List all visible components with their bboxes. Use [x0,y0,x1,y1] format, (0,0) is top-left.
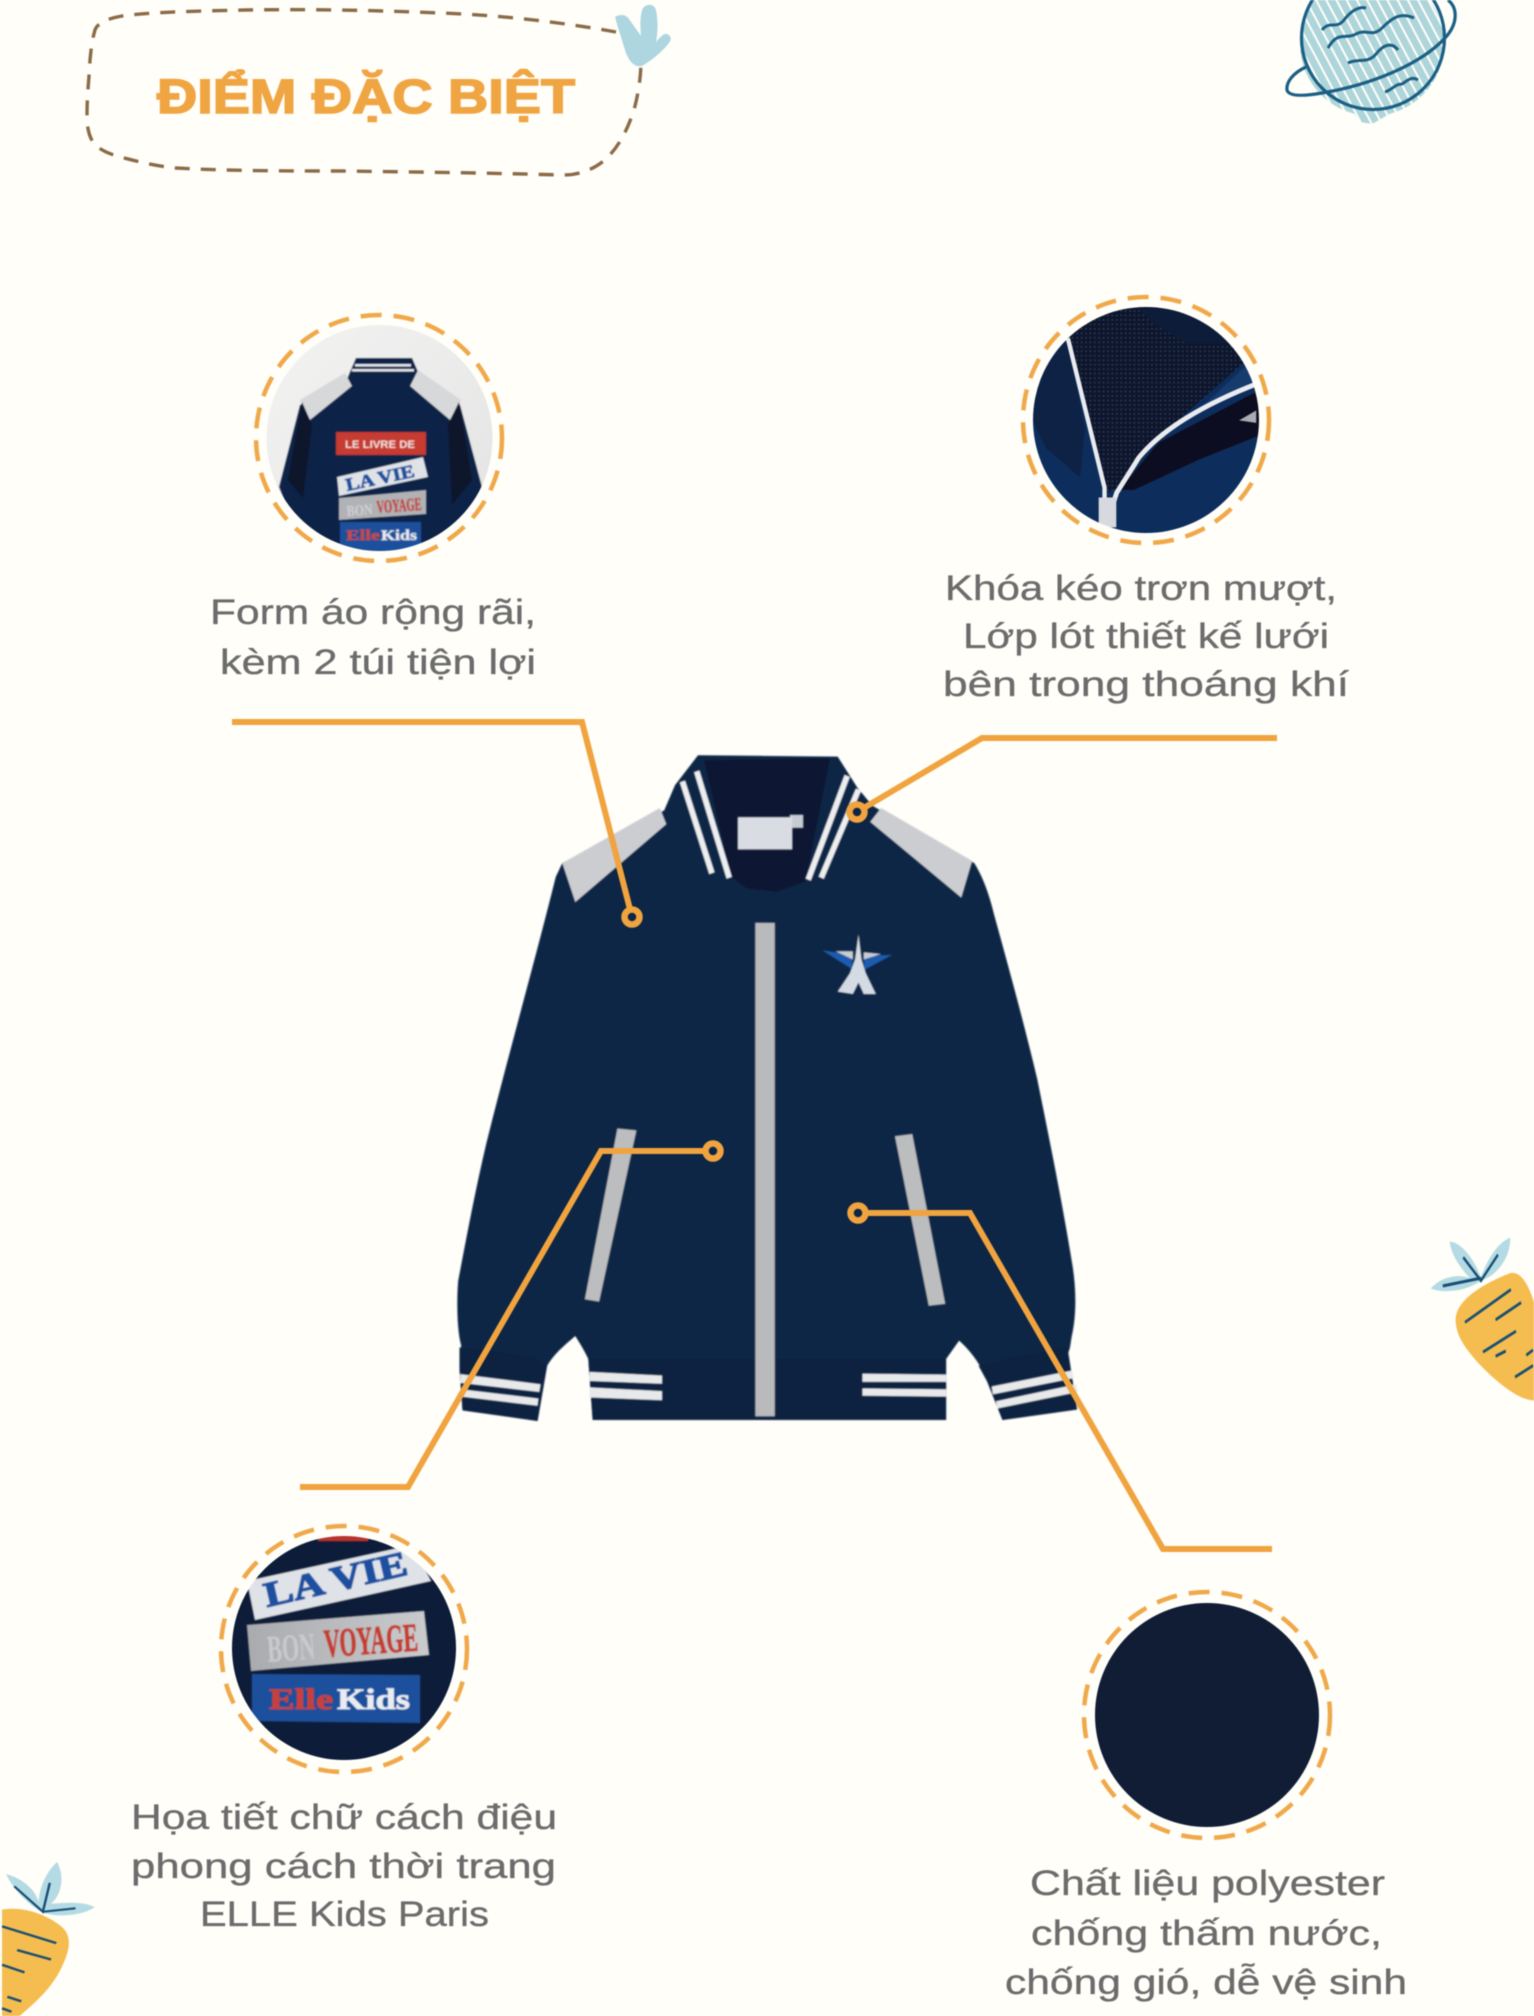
leader line: print [300,1144,720,1487]
leader line: material [850,1206,1272,1549]
panel: loose fit callout [210,315,536,682]
center zipper [755,923,775,1416]
jacket body [457,755,1077,1421]
photo: printed patches: LA VIE [260,1544,411,1615]
logo: tower and wings [822,934,892,994]
photo: zipper detail [1032,306,1260,534]
photo: fabric swatch [1095,1603,1319,1827]
dashed ring [1084,1592,1330,1838]
photo: jacket back [266,325,492,552]
photo: jacket back: VOYAGE [376,494,422,517]
dashed title outline [87,10,641,175]
collar stripes [682,771,858,880]
neck tag [738,815,803,849]
caption: Khóa kéo trơn mượt, [945,569,1337,608]
pocket zippers [585,1128,636,1302]
caption [210,593,536,682]
shoulder panels [562,808,666,902]
photo: printed patches: Kids [337,1683,410,1716]
photo: printed patches: Elle [269,1683,333,1716]
title text: ĐIỂM ĐẶC BIỆT [157,69,575,124]
title badge [87,10,641,175]
neck opening [704,758,830,892]
caption: Form áo rộng rãi, [210,593,536,632]
caption [1005,1864,1407,2002]
photo: printed patches: VOYAGE [322,1615,419,1666]
caption: Chất liệu polyester [1030,1864,1385,1903]
photo: jacket back: BON [346,502,373,520]
caption [131,1798,557,1934]
hem and cuff stripes [460,1370,1078,1409]
photo: jacket back: LE LIVRE DE [345,439,415,451]
photo: jacket back: Elle [346,528,380,544]
caption: chống thấm nước, [1031,1914,1382,1953]
caption: ELLE Kids Paris [200,1895,489,1934]
caption: Lớp lót thiết kế lưới [963,617,1329,656]
dashed ring [221,1526,467,1772]
photo: jacket back: Kids [381,528,417,544]
panel: zipper and mesh callout [943,297,1349,704]
icon: left carrot [2,1862,95,2016]
leader line: zipper [850,738,1277,820]
icon: planet [1287,0,1455,124]
caption: Họa tiết chữ cách điệu [131,1798,557,1837]
caption: bên trong thoáng khí [943,665,1349,704]
panel: lettering callout [131,1526,557,1934]
dashed ring [1023,297,1269,543]
photo: jacket back: LA VIE [344,461,416,495]
leader line: fit [232,722,640,924]
dashed ring [256,315,502,561]
photo: printed patches: BON [266,1626,317,1671]
caption: phong cách thời trang [131,1847,556,1886]
panel: material callout [1005,1592,1407,2002]
photo: printed patches [231,1535,457,1761]
jacket illustration [457,755,1078,1421]
caption: kèm 2 túi tiện lợi [220,643,536,682]
caption [943,569,1349,704]
icon: right carrot [1431,1237,1534,1401]
caption: chống gió, dễ vệ sinh [1005,1963,1407,2002]
icon: title leaf [615,5,671,66]
